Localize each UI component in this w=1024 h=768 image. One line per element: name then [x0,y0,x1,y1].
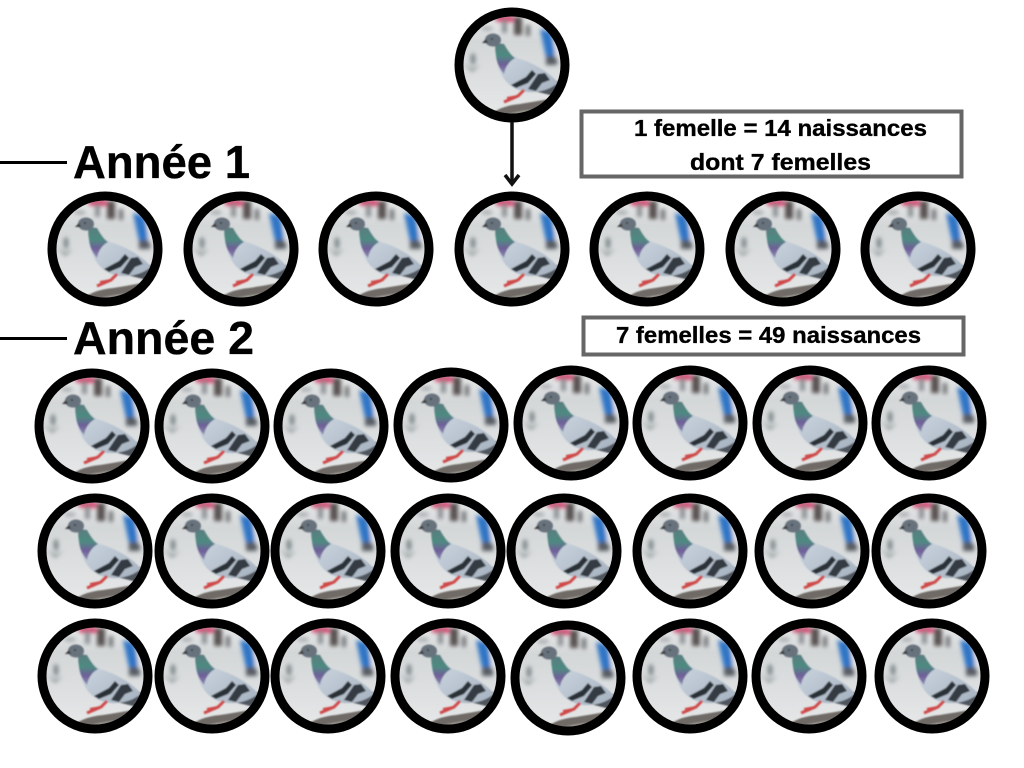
arrow: founder to year 1 [505,122,519,184]
callout: one female [582,112,962,176]
callout: seven females [584,318,964,354]
row: year 2 pigeons, second line [37,493,987,609]
callout: one female: 1 femelle = 14 naissances [634,115,927,141]
callout: one female: dont 7 femelles [690,149,871,175]
row: year 2 pigeons, first line [34,365,987,484]
heading: Année 1: Année 1 [73,136,250,188]
heading: Année 2: Année 2 [73,312,254,364]
icon: founding pigeon [454,7,570,123]
row: year 1 pigeons [47,191,976,307]
callout: seven females: 7 femelles = 49 naissances [616,322,921,348]
row: year 2 pigeons, third line [37,618,990,736]
